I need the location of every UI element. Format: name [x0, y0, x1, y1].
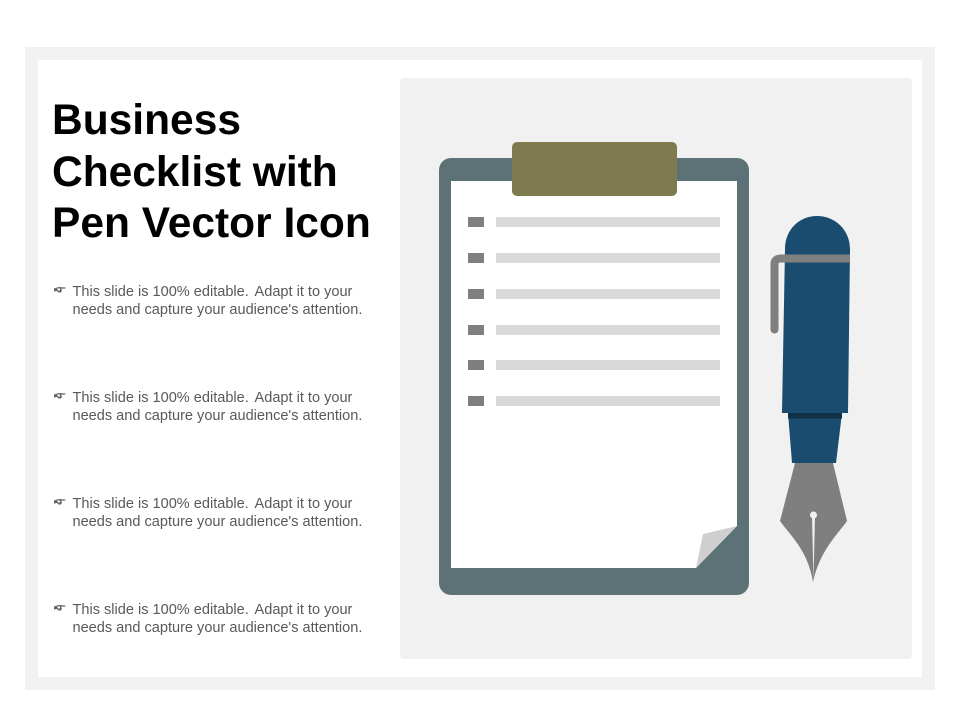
bullet text 4	[54, 602, 362, 636]
bullet text 3: needs and capture your audience's attention.	[72, 514, 362, 530]
checklist rows	[468, 217, 720, 406]
bullet text 3: This slide is 100% editable. Adapt it to your	[72, 496, 352, 512]
title: Checklist with	[52, 148, 338, 196]
bullet text 2: needs and capture your audience's attention.	[72, 408, 362, 424]
icon: fountain pen	[770, 216, 850, 582]
title: Pen Vector Icon	[52, 200, 371, 247]
bullet text 4: This slide is 100% editable. Adapt it to your	[72, 602, 352, 618]
bullet text 1: This slide is 100% editable. Adapt it to your	[72, 284, 352, 300]
illustration panel	[400, 78, 912, 659]
bullet text 1	[54, 284, 362, 318]
title: Business	[52, 97, 241, 144]
bullet text 1: needs and capture your audience's attention.	[72, 302, 362, 318]
bullet text 4: needs and capture your audience's attention.	[72, 620, 362, 636]
bullet text 2: This slide is 100% editable. Adapt it to your	[72, 390, 352, 406]
bullet text 2	[54, 390, 362, 424]
title	[52, 97, 371, 247]
icon: clipboard	[439, 142, 749, 595]
bullet text 3	[54, 496, 362, 530]
